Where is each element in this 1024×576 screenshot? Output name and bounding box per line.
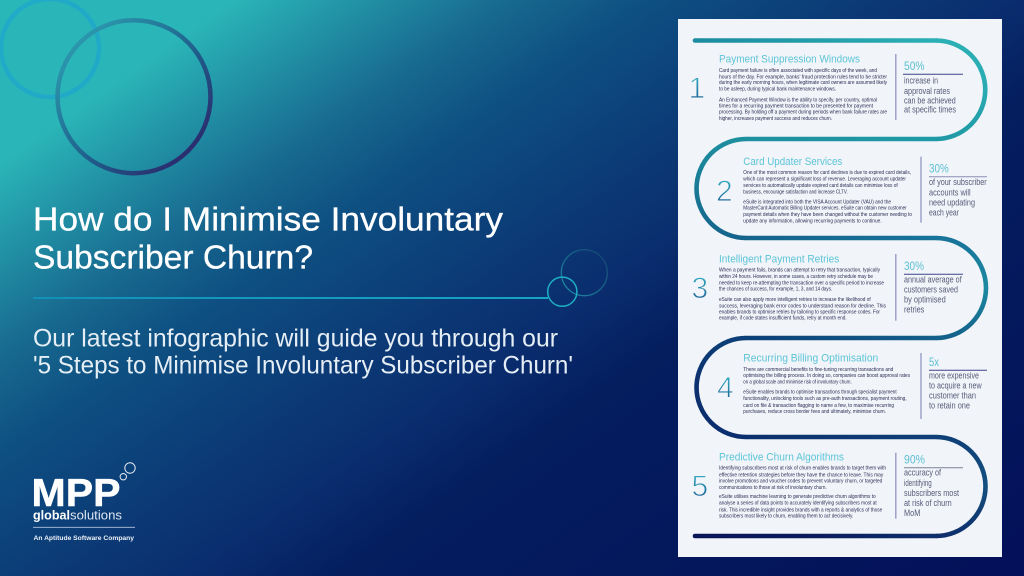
step 3 statistic xyxy=(896,254,963,321)
step 1 body text: during the early morning hours, when legitimate card owners are assumed likely xyxy=(719,80,887,86)
step 4 heading: Recurring Billing Optimisation xyxy=(743,353,878,365)
step 4 statistic: to acquire a new xyxy=(929,381,982,391)
step 5 statistic: accuracy of xyxy=(904,468,941,478)
step 5 statistic: 90% xyxy=(904,452,925,466)
step 4 body text: card on file & transaction flagging to name a few, to maximise recurring xyxy=(743,403,894,409)
step 1 statistic: at specific times xyxy=(904,105,956,115)
step 3 body text: the chances of success, for example, 1, 3, and 14 days. xyxy=(719,287,832,293)
step 4 statistic: customer than xyxy=(929,391,976,401)
step 5 body text: risk. This incredible insight provides brands with a reports & analytics of those xyxy=(719,507,882,513)
step 2 body text: MasterCard Automatic Billing Updater services. eSuite can obtain new customer xyxy=(743,205,907,211)
step 3 body text: within 24 hours. However, in some cases, a custom retry schedule may be xyxy=(718,274,873,280)
logo: MPP global solutions: An Aptitude Software Company xyxy=(34,535,135,542)
step 1 body text: to be asleep, during typical bank maintenance windows. xyxy=(719,86,836,92)
step 4 body text: on a global scale and minimise risk of involuntary churn. xyxy=(743,379,852,385)
step 5 body text: communications to those at risk of involuntary churn. xyxy=(719,485,827,491)
step 1 body text: processing. By holding off a payment during periods when bank failure rates are xyxy=(719,110,887,116)
step 2 statistic: of your subscriber xyxy=(929,177,987,187)
title: How do I Minimise Involuntary xyxy=(33,202,503,238)
step 3 number: 3 xyxy=(692,272,708,305)
step 3 body text: enables brands to optimise retries by tailoring to specific response codes. For xyxy=(719,309,880,315)
step 1 body text: An Enhanced Payment Window is the ability to specify, per country, optimal xyxy=(719,97,877,103)
step 1 body text: Card payment failure is often associated with specific days of the week, and xyxy=(719,68,877,74)
subtitle: Our latest infographic will guide you through our xyxy=(33,326,558,352)
step 2 statistic: each year xyxy=(929,207,959,217)
step 5 body text: eSuite utilises machine learning to generate predictive churn algorithms to xyxy=(719,494,876,500)
step 2 heading: Card Updater Services xyxy=(743,156,843,168)
step 1 number: 1 xyxy=(688,72,705,105)
step 4 body text: optimising the billing process. In doing so, companies can boost approval rates xyxy=(743,373,910,379)
step 3 statistic: annual average of xyxy=(904,275,962,285)
logo: MPP global solutions xyxy=(32,463,135,542)
step 1 statistic xyxy=(896,54,963,120)
step 1 statistic: increase in xyxy=(904,75,938,85)
step 4 statistic: to retain one xyxy=(929,401,970,411)
step 1 body text: higher, increases payment success and reduces churn. xyxy=(719,116,832,122)
step 5 body text: effective retention strategies before they have the chance to leave. This may xyxy=(719,472,884,478)
step 3 statistic: customers saved xyxy=(904,285,958,295)
logo: MPP global solutions: global xyxy=(33,508,70,522)
step 1 body text: times for a recurring payment transaction to be presented for payment xyxy=(719,103,873,109)
step 1: Payment Suppression Windows xyxy=(688,54,963,122)
step 4 statistic xyxy=(921,353,987,419)
logo: MPP global solutions: solutions xyxy=(70,508,122,522)
step 4 body text: There are commercial benefits to fine-tuning recurring transactions and xyxy=(743,367,893,373)
title xyxy=(33,202,503,276)
infographic panel background xyxy=(678,19,1002,557)
step 4 body text: purchases, reduce cross border fees and ultimately, minimise churn. xyxy=(743,409,886,415)
winding timeline path xyxy=(695,40,986,536)
step 3 statistic: by optimised xyxy=(904,295,946,305)
step 2 statistic: need updating xyxy=(929,197,975,207)
step 3 body text: example, if code states insufficient funds, retry at month end. xyxy=(719,316,847,322)
step 2 body text: services to automatically update expired card details can minimise loss of xyxy=(743,183,898,189)
step 4: Recurring Billing Optimisation xyxy=(717,353,987,419)
step 5 statistic: at risk of churn xyxy=(904,498,952,508)
step 5 body text: analyse a series of data points to accurately identifying subscribers most at xyxy=(719,501,877,507)
step 2 statistic: 30% xyxy=(929,162,949,176)
decorative circles, top left xyxy=(1,0,210,173)
step 4 body text: functionality, unlocking tools such as pre-auth transactions, payment routing, xyxy=(743,396,907,402)
step 4 statistic: 5x xyxy=(929,355,939,369)
step 2 body text: eSuite is integrated into both the VISA Account Updater (VAU) and the xyxy=(743,199,891,205)
step 5 statistic: identifying xyxy=(904,478,932,488)
step 2 number: 2 xyxy=(716,175,733,208)
step 1 body text xyxy=(719,68,887,122)
step 3 heading: Intelligent Payment Retries xyxy=(719,254,840,266)
step 1 heading: Payment Suppression Windows xyxy=(719,54,860,66)
step 2 body text xyxy=(742,170,912,224)
step 5 heading: Predictive Churn Algorithms xyxy=(719,452,844,464)
subtitle xyxy=(33,326,573,380)
step 5 statistic: MoM xyxy=(904,508,920,518)
step 3 body text: success, leveraging bank error codes to understand reason for decline. This xyxy=(719,303,886,309)
step 5 body text: Identifying subscribers most at risk of churn enables brands to target them with xyxy=(719,466,886,472)
step 2 body text: business, encourage satisfaction and increase CLTV. xyxy=(743,189,848,195)
step 3 body text: needed to keep re-attempting the transaction over a specific period to increase xyxy=(719,280,884,286)
step 2 body text: update any information, allowing recurring payments to continue. xyxy=(743,218,882,224)
step 5 body text xyxy=(719,466,886,520)
step 3 body text xyxy=(718,267,886,322)
step 1 statistic: can be achieved xyxy=(904,95,956,105)
step 2 body text: payment details when they have been changed without the customer needing to xyxy=(743,212,912,218)
step 3 body text: eSuite can also apply more intelligent retries to increase the likelihood of xyxy=(719,297,871,303)
step 3 body text: When a payment fails, brands can attempt to retry that transaction, typically xyxy=(719,267,880,273)
step 2 statistic: accounts will xyxy=(929,187,971,197)
step 1 statistic: approval rates xyxy=(904,86,950,96)
step 2 body text: One of the most common reason for card declines is due to expired card details, xyxy=(743,170,911,176)
step 4 body text: eSuite enables brands to optimise transactions through specialist payment xyxy=(743,390,897,396)
step 1 statistic: 50% xyxy=(904,59,925,73)
step 2 statistic xyxy=(921,157,987,223)
step 4 body text xyxy=(743,367,910,415)
step 5 body text: involve promotions and voucher codes to prevent voluntary churn, or targeted xyxy=(719,479,882,485)
step 5 statistic xyxy=(896,452,963,519)
step 3 statistic: retries xyxy=(904,305,925,315)
step 3: Intelligent Payment Retries xyxy=(692,254,963,322)
step 5 body text: subscribers most likely to churn, enabling them to act decisively. xyxy=(719,514,853,520)
title: Subscriber Churn? xyxy=(33,240,313,276)
step 5: Predictive Churn Algorithms xyxy=(692,452,963,520)
step 4 statistic: more expensive xyxy=(929,371,979,381)
step 5 statistic: subscribers most xyxy=(904,488,959,498)
step 1 body text: hours of the day. For example, banks' fraud protection rules tend to be stricter xyxy=(719,74,887,80)
step 4 number: 4 xyxy=(717,372,734,404)
subtitle: '5 Steps to Minimise Involuntary Subscriber Churn' xyxy=(33,352,573,380)
step 3 statistic: 30% xyxy=(904,259,924,273)
logo: MPP global solutions: MPP xyxy=(32,472,120,515)
step 5 number: 5 xyxy=(692,470,708,503)
divider line with linked circles xyxy=(33,250,607,306)
step 2: Card Updater Services xyxy=(716,156,987,224)
step 2 body text: which can represent a significant loss of revenue. Leveraging account updater xyxy=(742,176,906,182)
